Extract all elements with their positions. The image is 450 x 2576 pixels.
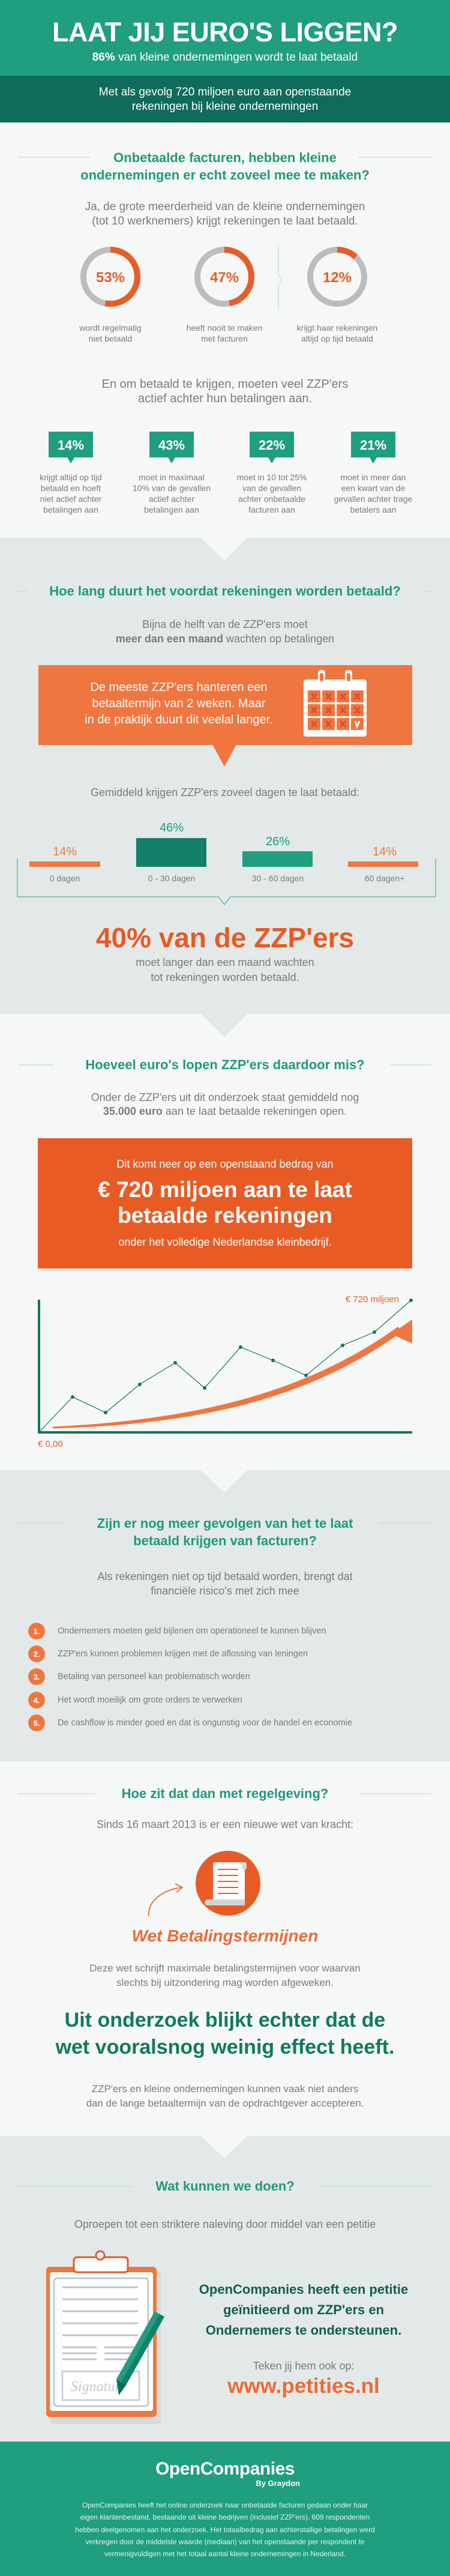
subtitle: 86% van kleine ondernemingen wordt te laat betaald bbox=[92, 51, 358, 64]
text: 10% van de gevallen bbox=[133, 483, 211, 493]
box 43%: 43% bbox=[158, 438, 185, 453]
heading: hoeveel euro's: Hoeveel euro's lopen ZZP'ers daardoor mis? bbox=[85, 1057, 365, 1072]
donut labels bbox=[79, 323, 142, 343]
donut: 47%: 47% bbox=[210, 270, 239, 286]
list: gevolgen bbox=[28, 1623, 352, 1731]
big statement: weinig effect: wet vooralsnog weinig effect heeft. bbox=[56, 2035, 394, 2058]
paragraph: 35.000 euro: 35.000 euro aan te laat betaalde rekeningen open. bbox=[103, 1105, 347, 1117]
link: petities.nl: www.petities.nl bbox=[227, 2374, 380, 2398]
intro band text: Met als gevolg 720 miljoen euro aan openstaande bbox=[99, 86, 351, 98]
icon: clipboard with pen bbox=[46, 2250, 164, 2424]
donut: 53%: 53% bbox=[96, 270, 125, 286]
paragraph: meer dan een maand: Bijna de helft van de ZZP'ers moet bbox=[142, 618, 308, 630]
text: facturen aan bbox=[248, 505, 295, 514]
bar 0 dagen: 14% bbox=[53, 845, 77, 858]
paragraph: meer dan een maand bbox=[116, 618, 334, 645]
donut: 12% bbox=[310, 250, 364, 304]
paragraph: 35.000 euro: Onder de ZZP'ers uit dit onderzoek staat gemiddeld nog bbox=[91, 1091, 359, 1103]
paragraph: financiele risico's: Als rekeningen niet op tijd betaald worden, brengt dat bbox=[97, 1570, 353, 1582]
box 22% bbox=[250, 432, 294, 463]
list: gevolgen: 1. bbox=[34, 1627, 40, 1636]
donut labels: wordt regelmatig bbox=[79, 323, 142, 333]
intro band text: rekeningen bij kleine ondernemingen bbox=[132, 100, 318, 113]
text: gevallen achter trage bbox=[334, 494, 412, 504]
callout: 720 miljoen: onder het volledige Nederlandse kleinbedrijf. bbox=[118, 1236, 332, 1248]
petition statement: OpenCompanies heeft een petitie bbox=[199, 2282, 408, 2297]
footer text: vermenigvuldigen met het totaal aantal kleine ondernemingen in Nederland. bbox=[104, 2550, 346, 2558]
callout: betaaltermijn: De meeste ZZP'ers hanteren een bbox=[90, 681, 268, 694]
intro band text bbox=[99, 86, 351, 113]
intro paragraph bbox=[85, 201, 365, 228]
footer text bbox=[75, 2501, 375, 2558]
donut charts bbox=[80, 245, 367, 310]
paragraph: accepteren: dan de lange betaaltermijn van de opdrachtgever accepteren. bbox=[86, 2098, 364, 2109]
paragraph: langer dan een maand bbox=[136, 956, 314, 983]
paragraph: wet uitleg: slechts bij uitzondering mag worden afgeweken. bbox=[116, 1977, 334, 1988]
paragraph: sinds 16 maart: Sinds 16 maart 2013 is er een nieuwe wet van kracht: bbox=[97, 1818, 353, 1830]
call to action: Teken jij hem ook op: bbox=[253, 2360, 355, 2372]
list: gevolgen: Betaling van personeel kan problematisch worden bbox=[58, 1672, 250, 1682]
bar 0 dagen bbox=[29, 845, 100, 867]
text: krijgt haar rekeningen bbox=[297, 323, 377, 333]
donut: 12%: 12% bbox=[323, 270, 352, 286]
footer text: eigen klantenbestand, bestaande uit kleine bedrijven (inclusief ZZP'ers). 609 respondenten bbox=[80, 2513, 370, 2521]
paragraph: 35.000 euro bbox=[91, 1091, 359, 1117]
bar 0-30 bbox=[136, 821, 206, 867]
text: betalingen aan bbox=[144, 505, 199, 514]
arrow: growth bbox=[53, 1328, 401, 1428]
text: heeft nooit te maken bbox=[187, 323, 262, 333]
paragraph: accepteren: ZZP'ers en kleine ondernemingen kunnen vaak niet anders bbox=[92, 2083, 358, 2095]
text: achter onbetaalde bbox=[238, 494, 305, 504]
list: gevolgen: De cashflow is minder goed en dat is ongunstig voor de handel en economie bbox=[58, 1718, 352, 1728]
bar chart: dagen te laat bbox=[17, 821, 436, 905]
intro paragraph: (tot 10 werknemers) krijgt rekeningen te laat betaald. bbox=[92, 215, 358, 228]
box 14%: 14% bbox=[58, 438, 84, 453]
heading: meer gevolgen: betaald krijgen van facturen? bbox=[133, 1533, 317, 1548]
paragraph: wet uitleg: Deze wet schrijft maximale betalingstermijnen voor waarvan bbox=[89, 1962, 361, 1974]
box 43% bbox=[149, 432, 194, 463]
heading: meer gevolgen: Zijn er nog meer gevolgen van het te laat bbox=[97, 1515, 353, 1531]
bar chart: dagen te laat: 0 - 30 dagen bbox=[148, 873, 195, 883]
paragraph: meer dan een maand: meer dan een maand wachten op betalingen bbox=[116, 633, 334, 645]
callout: betaaltermijn: betaaltermijn van 2 weken. Maar bbox=[92, 696, 266, 710]
footer logo bbox=[155, 2459, 300, 2488]
paragraph: financiele risico's: financiële risico's met zich mee bbox=[151, 1585, 299, 1597]
box 22%: 22% bbox=[259, 438, 285, 453]
big stat: 40%: 40% van de ZZP'ers bbox=[96, 922, 354, 953]
paragraph: langer dan een maand: tot rekeningen worden betaald. bbox=[151, 971, 299, 983]
footer text: verkregen door de middelste waarde (mediaan) van het openstaande per respondent te bbox=[86, 2538, 364, 2546]
heading: onbetaalde facturen: ondernemingen er echt zoveel mee te maken? bbox=[80, 167, 370, 182]
donut labels: niet betaald bbox=[89, 334, 132, 343]
paragraph: petitie: Oproepen tot een striktere naleving door middel van een petitie bbox=[74, 2218, 376, 2230]
stat boxes bbox=[49, 432, 395, 463]
heading: onbetaalde facturen: Onbetaalde facturen, hebben kleine bbox=[113, 150, 337, 164]
list: gevolgen: Het wordt moeilijk om grote orders te verwerken bbox=[58, 1695, 242, 1705]
heading: wat kunnen we doen: Wat kunnen we doen? bbox=[155, 2179, 295, 2194]
bar 30-60 bbox=[242, 835, 313, 867]
bar chart: dagen te laat: 0 dagen bbox=[50, 873, 80, 883]
text: betalers aan bbox=[350, 505, 397, 514]
text: van de gevallen bbox=[242, 483, 301, 493]
bar 60+ bbox=[348, 845, 418, 867]
list: gevolgen: 2. bbox=[34, 1650, 40, 1659]
icon: clipboard with pen: Signature bbox=[71, 2379, 127, 2395]
list: gevolgen: ZZP'ers kunnen problemen krijgen met de aflossing van leningen bbox=[58, 1649, 308, 1659]
stat descriptions: niet actief achter bbox=[40, 494, 101, 504]
paragraph: financiele risico's bbox=[97, 1570, 353, 1597]
heading: wet betalingstermijnen: Wet Betalingstermijnen bbox=[132, 1926, 318, 1945]
intro paragraph: Ja, de grote meerderheid van de kleine ondernemingen bbox=[85, 201, 365, 213]
text: actief achter bbox=[149, 494, 194, 504]
callout: betaaltermijn: in de praktijk duurt dit veelal langer. bbox=[85, 713, 273, 726]
callout: 720 miljoen bbox=[38, 1138, 412, 1268]
stat descriptions: betaald en hoeft bbox=[41, 483, 101, 493]
bar chart: dagen te laat: 30 - 60 dagen bbox=[252, 873, 304, 883]
big statement: weinig effect bbox=[55, 2009, 394, 2058]
petition statement: geïnitieerd om ZZP'ers en bbox=[223, 2302, 384, 2317]
paragraph: accepteren bbox=[86, 2083, 364, 2109]
callout: 720 miljoen: € 720 miljoen aan te laat bbox=[98, 1177, 352, 1202]
footer text: OpenCompanies heeft het online onderzoek naar onbetaalde facturen gedaan onder haar bbox=[82, 2501, 368, 2509]
petition statement bbox=[199, 2282, 408, 2338]
paragraph: gemiddeld dagen: Gemiddeld krijgen ZZP'ers zoveel dagen te laat betaald: bbox=[91, 786, 359, 798]
big statement: weinig effect: Uit onderzoek blijkt echter dat de bbox=[65, 2009, 385, 2032]
bar chart: dagen te laat: 60 dagen+ bbox=[365, 873, 404, 883]
icon: calendar bbox=[304, 670, 367, 737]
stat descriptions: krijgt altijd op tijd bbox=[40, 472, 102, 482]
list: gevolgen: 4. bbox=[34, 1696, 40, 1705]
title: LAAT JIJ EURO'S LIGGEN? bbox=[52, 17, 398, 47]
heading: meer gevolgen bbox=[97, 1515, 353, 1548]
bar 30-60: 26% bbox=[266, 835, 290, 848]
bar 0-30: 46% bbox=[160, 821, 184, 834]
list: gevolgen: Ondernemers moeten geld bijlenen om operationeel te kunnen blijven bbox=[58, 1626, 326, 1636]
text: een kwart van de bbox=[341, 483, 405, 493]
icon: law scroll with arrow bbox=[148, 1851, 260, 1916]
line chart bbox=[38, 1294, 413, 1449]
text: moet in 10 tot 25% bbox=[237, 472, 307, 482]
donut: 47% bbox=[197, 250, 251, 304]
callout: betaaltermijn bbox=[38, 665, 412, 767]
text: moet in maximaal bbox=[139, 472, 205, 482]
paragraph: actief achter betalingen: actief achter hun betalingen aan. bbox=[138, 392, 312, 405]
list: gevolgen: 3. bbox=[34, 1673, 40, 1682]
line chart: € 0,00 bbox=[38, 1439, 63, 1449]
bar 60+: 14% bbox=[373, 845, 397, 858]
callout: 720 miljoen: betaalde rekeningen bbox=[118, 1203, 332, 1227]
box 14% bbox=[49, 432, 93, 463]
donut: 53% bbox=[83, 250, 137, 304]
footer logo: By Graydon bbox=[256, 2479, 300, 2488]
box 21%: 21% bbox=[360, 438, 386, 453]
paragraph: langer dan een maand: moet langer dan een maand wachten bbox=[136, 956, 314, 968]
heading: regelgeving: Hoe zit dat dan met regelgeving? bbox=[122, 1786, 328, 1801]
petition statement: Ondernemers te ondersteunen. bbox=[206, 2323, 401, 2338]
heading: onbetaalde facturen bbox=[80, 150, 370, 182]
paragraph: actief achter betalingen: En om betaald te krijgen, moeten veel ZZP'ers bbox=[102, 378, 348, 391]
text: moet in meer dan bbox=[341, 472, 406, 482]
box 21% bbox=[351, 432, 395, 463]
text: met facturen bbox=[201, 334, 248, 343]
line chart: € 720 miljoen bbox=[346, 1294, 399, 1305]
text: altijd op tijd betaald bbox=[301, 334, 373, 343]
footer text: hebben deelgenomen aan het onderzoek. Het totaalbedrag aan achterstallige betalingen werd bbox=[75, 2526, 375, 2534]
paragraph: wet uitleg bbox=[89, 1962, 361, 1988]
callout: 720 miljoen: Dit komt neer op een openstaand bedrag van bbox=[116, 1158, 334, 1170]
list: gevolgen: 5. bbox=[34, 1719, 40, 1728]
stat descriptions bbox=[40, 472, 102, 514]
heading: hoe lang duurt het: Hoe lang duurt het voordat rekeningen worden betaald? bbox=[49, 584, 401, 599]
footer logo: OpenCompanies bbox=[155, 2459, 295, 2479]
paragraph: actief achter betalingen bbox=[102, 378, 348, 405]
stat descriptions: betalingen aan bbox=[43, 505, 98, 514]
